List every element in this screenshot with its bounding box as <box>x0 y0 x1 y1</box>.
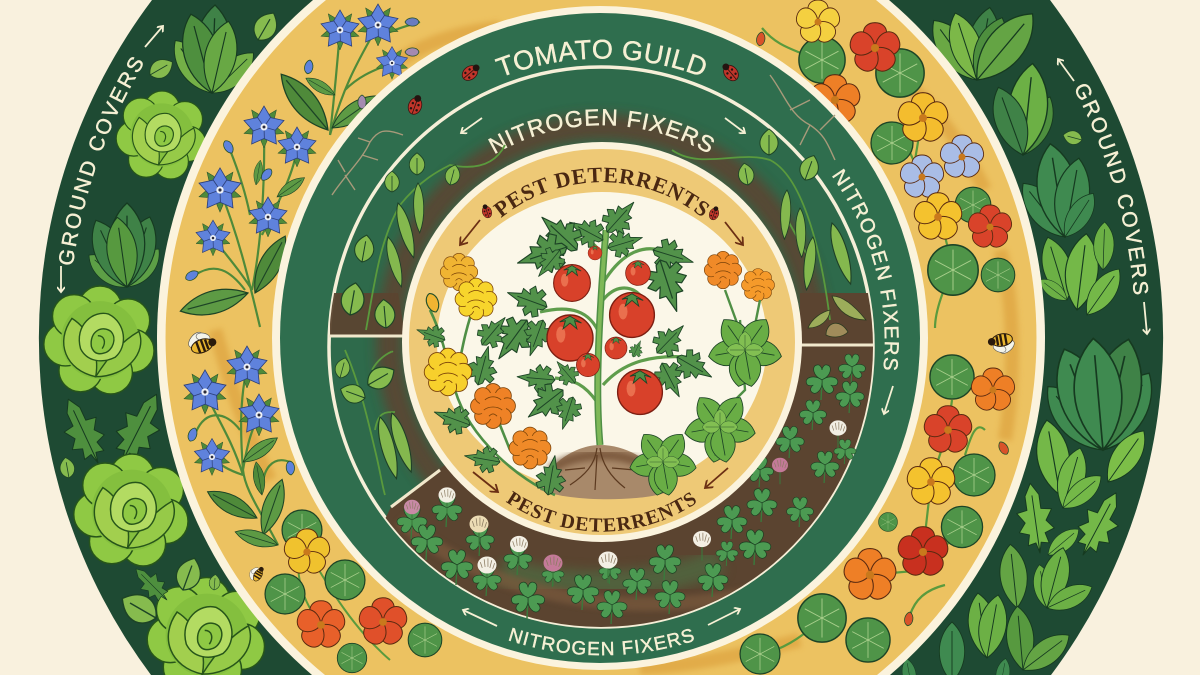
panel: inner plant sections <box>327 65 875 629</box>
plants: borage top <box>272 4 420 138</box>
icon: small bee <box>245 562 266 584</box>
plants: right ground covers <box>900 2 1165 675</box>
label: nitrogen fixers top: NITROGEN FIXERS <box>488 109 714 154</box>
arrows: ground covers <box>61 26 1147 334</box>
label: pest deterrents top: PEST DETERRENTS <box>492 168 710 218</box>
root nodules <box>808 296 866 337</box>
icons: small ladybugs <box>480 203 721 221</box>
arrows: nitrogen bottom and right <box>463 386 893 626</box>
panel: tomato guild ring <box>272 6 928 670</box>
icon: bee right <box>987 332 1018 358</box>
plants: clovers <box>396 354 867 624</box>
plants: nasturtium lower right <box>740 355 1017 674</box>
plants: peas upper right <box>672 129 866 337</box>
label: tomato guild: TOMATO GUILD <box>494 40 706 76</box>
plants: borage upper left <box>177 106 318 327</box>
plants: left ground covers <box>44 4 283 675</box>
tomato leaves <box>484 192 719 433</box>
plant: basil <box>628 290 784 497</box>
label: ground covers right: GROUND COVERS <box>1076 84 1148 294</box>
plants: peas lower left <box>333 350 416 495</box>
soil halo <box>389 127 815 557</box>
arrows: pest deterrents <box>460 220 743 492</box>
label: nitrogen fixers right: NITROGEN FIXERS <box>832 168 899 370</box>
panel: pest deterrents disc <box>402 142 802 542</box>
panel: companion flowers ring <box>157 0 1045 675</box>
soil sector <box>386 346 873 627</box>
soil and roots <box>540 445 668 499</box>
label: pest deterrents bottom: PEST DETERRENTS <box>506 490 696 532</box>
plants: nasturtium upper right <box>755 0 1015 328</box>
plants: borage lower left <box>182 346 295 552</box>
plants: nasturtium lower left <box>265 510 442 673</box>
plant: tomato <box>484 192 719 445</box>
icons: ladybugs <box>406 60 741 116</box>
label: ground covers left: GROUND COVERS <box>59 57 143 265</box>
dividers <box>329 336 873 507</box>
plants: peas upper left <box>339 145 505 330</box>
tomatoes <box>547 246 662 414</box>
label: nitrogen fixers bottom: NITROGEN FIXERS <box>508 628 694 656</box>
arrows: nitrogen top <box>461 118 745 133</box>
plant: marigolds <box>413 251 774 498</box>
icon: bee left <box>183 325 218 357</box>
icons: roots in ring <box>332 75 835 195</box>
